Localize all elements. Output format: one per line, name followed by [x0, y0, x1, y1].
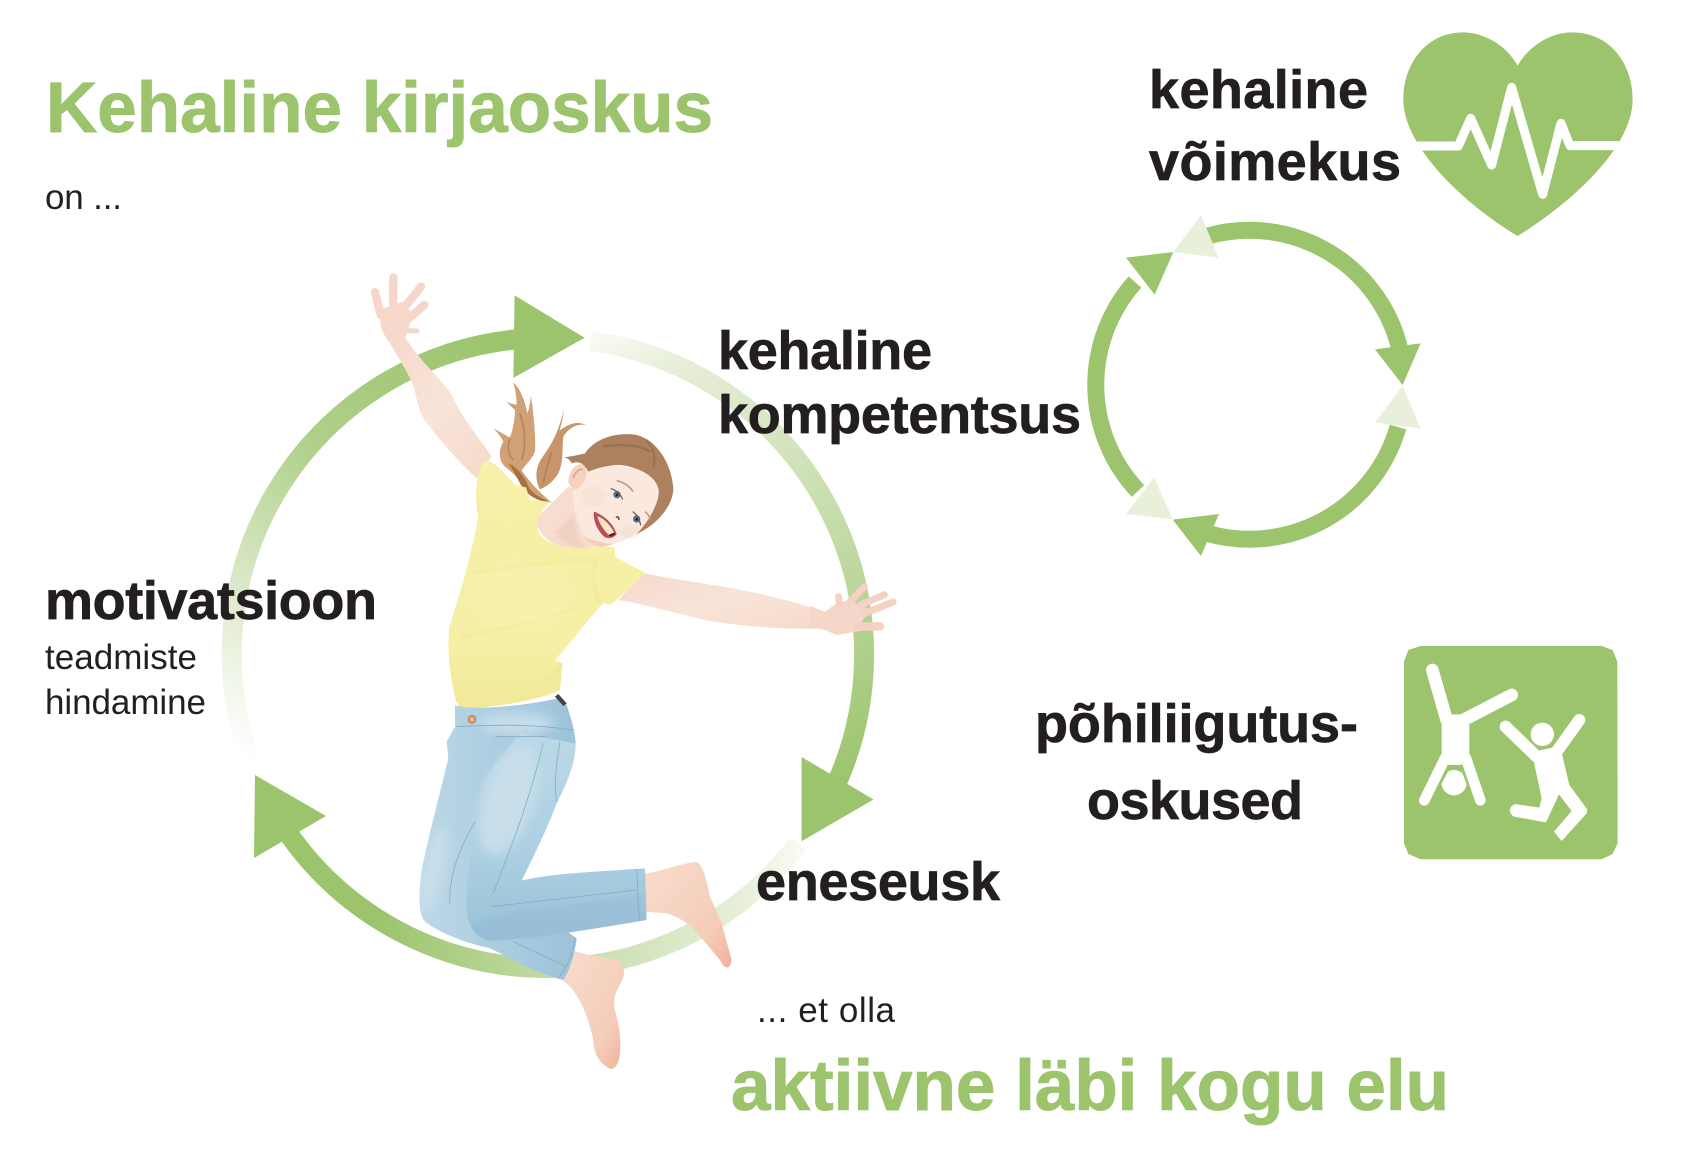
hair on head: [564, 434, 673, 534]
label: kehaline kompetentsus: [718, 321, 1081, 445]
jumping figure: [1506, 720, 1587, 841]
jeans seams and details: [450, 725, 639, 978]
text: ... et olla: ... et olla: [757, 991, 896, 1030]
label: kehaline võimekus: [1149, 60, 1401, 192]
small cycle with three arrows: [1096, 215, 1421, 556]
label: kehaline võimekus: kehaline: [1149, 60, 1368, 120]
label: põhiliigutusoskused: oskused: [1087, 771, 1303, 831]
smile: [594, 512, 617, 538]
girl outstretched hand: [810, 587, 893, 635]
text: on ...: on ...: [45, 178, 122, 217]
arrow arc: confidence to motivation: [254, 775, 798, 968]
girl feet: [562, 862, 732, 1069]
girl raised arm and hand: [375, 277, 492, 478]
label: eneseusk: eneseusk: [756, 852, 1001, 912]
label: kehaline kompetentsus: kompetentsus: [718, 385, 1081, 445]
label: kehaline kompetentsus: kehaline: [718, 321, 932, 381]
label: põhiliigutusoskused: põhiliigutus-: [1035, 694, 1358, 754]
label: motivatsioon with teadmiste hindamine: teadmiste: [45, 638, 197, 677]
large cycle with three arrows: [232, 295, 873, 968]
girl jeans: [413, 694, 647, 980]
heading: aktiivne läbi kogu elu: aktiivne läbi kogu elu: [731, 1047, 1449, 1126]
girl shirt: [448, 461, 645, 709]
label: motivatsioon with teadmiste hindamine: motivatsioon: [45, 571, 377, 631]
cartwheel figure: [1424, 670, 1512, 800]
nose: [616, 517, 619, 520]
eyes: [609, 487, 624, 501]
girl neck, face and head: [537, 434, 673, 548]
girl outstretched arm: [618, 573, 828, 630]
label: motivatsioon with teadmiste hindamine: hindamine: [45, 683, 206, 722]
girl ponytail hair: [493, 383, 586, 503]
icon: children moving: [1404, 646, 1618, 859]
title: Kehaline kirjaoskus: Kehaline kirjaoskus: [46, 69, 713, 148]
label: põhiliigutusoskused: [1035, 694, 1358, 831]
ear: [568, 464, 587, 490]
icon: heart with pulse line: [1403, 32, 1633, 236]
photo: jumping girl: [375, 277, 893, 1069]
label: motivatsioon with teadmiste hindamine: [45, 571, 377, 722]
arrow arc: competence to confidence: [590, 341, 874, 841]
label: kehaline võimekus: võimekus: [1149, 132, 1401, 192]
arrow arc: motivation to competence: [232, 295, 585, 760]
